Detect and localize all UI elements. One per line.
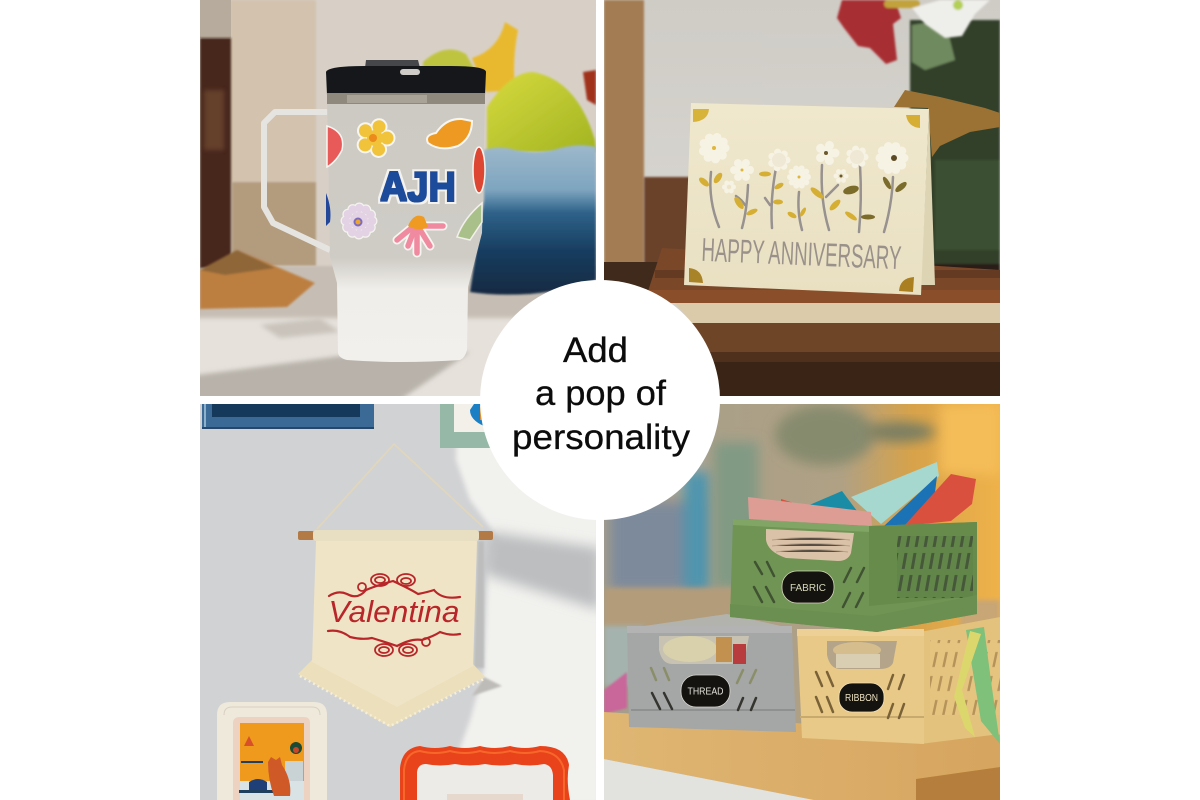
wooden tray	[200, 250, 315, 309]
mug monogram: AJH	[380, 163, 456, 210]
headline: Add	[563, 331, 628, 370]
crate label: fabric	[782, 571, 834, 603]
blurred background	[604, 404, 1000, 714]
glass vase	[905, 20, 1000, 276]
name lettering: Valentina	[328, 594, 460, 629]
crate slots	[652, 693, 756, 710]
olive leaves	[842, 176, 908, 220]
wavy red frame	[400, 746, 570, 800]
headline: personality	[512, 418, 691, 457]
sticker: lilac flower	[346, 208, 372, 234]
headline: a pop of	[535, 374, 666, 413]
crate label: thread: THREAD	[688, 686, 724, 698]
ribbon bow	[894, 90, 1000, 157]
crate label: fabric: FABRIC	[790, 582, 826, 594]
crate label: ribbon	[839, 683, 884, 712]
mug body	[327, 102, 485, 362]
panel: anniversary card photo	[604, 0, 1000, 396]
sticker: fern	[457, 203, 482, 240]
pennant	[298, 530, 493, 727]
grey crate	[627, 614, 796, 732]
crate label: ribbon: RIBBON	[845, 693, 878, 704]
paper flowers	[703, 137, 904, 192]
marble counter	[200, 265, 596, 396]
fringe	[298, 660, 485, 727]
picture frame: blue	[202, 404, 374, 429]
panel: storage crates photo	[604, 404, 1000, 800]
hanging string	[317, 444, 483, 529]
card greeting: HAPPY ANNIVERSARY	[701, 231, 902, 276]
crate slots	[754, 562, 864, 607]
gold corners	[689, 109, 920, 292]
sticker: pink flower	[397, 216, 443, 253]
sticker: blue flower	[326, 193, 330, 226]
panel: mug photo	[190, 0, 600, 410]
green crate	[730, 519, 977, 632]
flower centers	[712, 146, 897, 178]
crate label: thread	[681, 675, 730, 707]
wooden countertop	[604, 712, 1000, 800]
flowers	[837, 0, 990, 64]
paper flower leaves	[697, 171, 858, 222]
panel: Valentina pennant photo	[200, 404, 600, 800]
lid	[326, 60, 486, 104]
greeting card	[684, 103, 935, 295]
yellow crate	[797, 617, 1000, 744]
cat print	[217, 702, 327, 800]
jar of dried goods	[200, 0, 231, 268]
fabric bundle	[748, 462, 976, 526]
layered wooden stand	[644, 248, 1000, 396]
wooden dowel	[298, 530, 493, 541]
fruit	[423, 22, 596, 152]
handle	[264, 112, 330, 250]
sticker: mango	[427, 119, 472, 148]
sunlight on wall	[454, 448, 596, 800]
paper flower stems	[710, 165, 893, 232]
sticker: yellow flower	[363, 126, 387, 150]
sticker: red leaf	[327, 126, 343, 167]
crate slots	[816, 672, 904, 718]
mug	[264, 60, 486, 362]
sticker: red flower	[473, 147, 485, 193]
picture frame: green	[440, 404, 490, 448]
blue bowl	[470, 145, 596, 295]
headline	[512, 331, 691, 457]
center circle callout	[480, 280, 720, 520]
bottom ribbon bow	[328, 631, 460, 656]
ribbons	[954, 627, 1000, 744]
top ribbon bow	[329, 574, 460, 598]
